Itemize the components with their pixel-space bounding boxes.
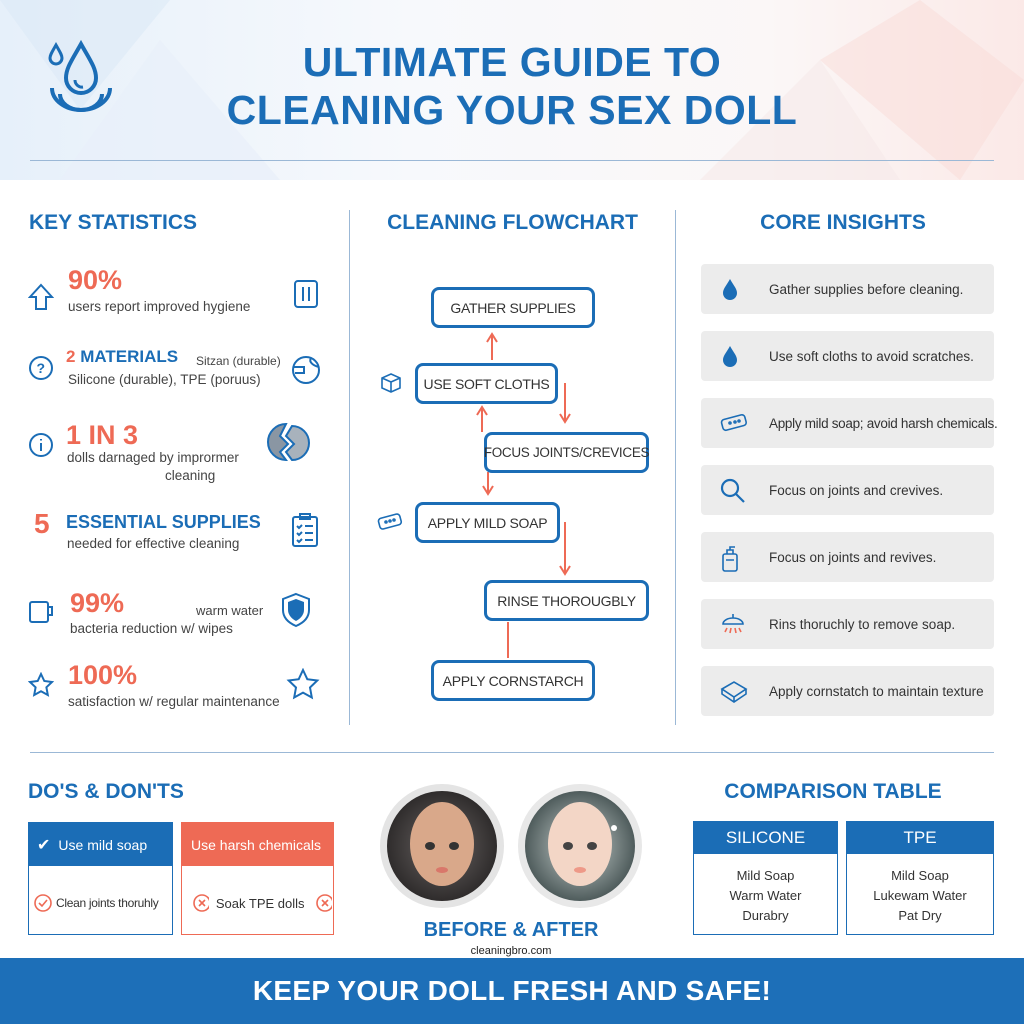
stat: 2 materials: ? [36, 360, 45, 376]
source text: cleaningbro.com [471, 945, 551, 957]
flow step: focus joints: FOCUS JOINTS/CREVICES [484, 445, 649, 460]
insight 4 [701, 465, 994, 515]
insight 2: Use soft cloths to avoid scratches. [769, 348, 974, 364]
heading: key statistics: KEY STATISTICS [29, 211, 197, 234]
stat: 2 materials: Sitzan (durable) [196, 354, 281, 368]
header background [0, 0, 1024, 180]
insight 3 [701, 398, 994, 448]
do box: Use mild soap [58, 836, 147, 852]
stat: 99%: 99% [70, 588, 124, 618]
insight 3: Apply mild soap; avoid harsh chemicals. [769, 416, 997, 430]
column: tpe: TPE [903, 828, 937, 847]
insight 7: Apply cornstatch to maintain texture [769, 684, 984, 698]
footer banner [0, 958, 1024, 1024]
dont box: Soak TPE dolls [216, 896, 305, 910]
title: CLEANING YOUR SEX DOLL [227, 87, 797, 133]
insight 7 [701, 666, 994, 716]
stat: 1 in 3: cleaning [165, 468, 215, 483]
title [227, 39, 797, 133]
heading: comparison table: COMPARISON TABLE [724, 780, 942, 803]
column: tpe [846, 821, 994, 935]
flow step: gather supplies [431, 287, 595, 328]
column: silicone: SILICONE [726, 828, 805, 847]
face: before [380, 784, 504, 908]
stat: 2 materials: 2 MATERIALS [66, 347, 178, 366]
flow step: apply cornstarch [431, 660, 595, 701]
icon: water drop logo [48, 40, 112, 112]
panel: comparison table [693, 780, 994, 935]
face: after [518, 784, 642, 908]
dont box: Use harsh chemicals [191, 836, 321, 852]
column: silicone: Durabry [742, 908, 789, 923]
stat: 99%: warm water [196, 603, 263, 618]
stat: 99% [29, 588, 310, 636]
stat: 5 essential supplies: 5 [34, 508, 50, 539]
column: silicone: Mild Soap [737, 868, 794, 883]
flow step: apply cornstarch: APPLY CORNSTARCH [443, 672, 583, 688]
insight 1 [701, 264, 994, 314]
panel: dos and donts [28, 780, 334, 935]
stat: 5 essential supplies [34, 508, 318, 551]
do box [28, 822, 173, 935]
stat: 100% [28, 660, 320, 709]
footer banner: KEEP YOUR DOLL FRESH AND SAFE! [253, 975, 771, 1006]
column: tpe: Pat Dry [898, 908, 942, 923]
insight 6: Rins thoruchly to remove soap. [769, 616, 955, 632]
icon: cube [381, 373, 401, 393]
stat: 2 materials [29, 347, 320, 387]
column: silicone [693, 821, 838, 935]
flow step: apply mild soap: APPLY MILD SOAP [428, 514, 547, 530]
heading: cleaning flowchart: CLEANING FLOWCHART [387, 211, 638, 234]
flow step: rinse thoroughly: RINSE THOROUGBLY [497, 592, 636, 608]
stat: 2 materials: Silicone (durable), TPE (poruus) [68, 372, 261, 387]
insight 5: Focus on joints and revives. [769, 550, 936, 564]
column: silicone: Warm Water [730, 888, 801, 903]
flow step: gather supplies: GATHER SUPPLIES [450, 300, 576, 316]
insight 2 [701, 331, 994, 381]
insight 6 [701, 599, 994, 649]
title: ULTIMATE GUIDE TO [303, 39, 721, 85]
flowchart arrows [476, 332, 571, 658]
insight 4: Focus on joints and crevives. [769, 482, 943, 498]
stat: 90% [28, 265, 318, 314]
flow step: use soft cloths [415, 363, 558, 404]
flow step: focus joints [484, 432, 649, 473]
before and after images [380, 784, 642, 957]
stat: 1 in 3: 1 IN 3 [66, 420, 138, 450]
stat: 1 in 3 [29, 420, 310, 483]
stat: 5 essential supplies: ESSENTIAL SUPPLIES [66, 512, 261, 532]
panel: key statistics [28, 211, 320, 709]
flow step: rinse thoroughly [484, 580, 649, 621]
insight 5 [701, 532, 994, 582]
do box: ✔ [37, 836, 50, 854]
stat: 90%: users report improved hygiene [68, 299, 250, 314]
insight 1: Gather supplies before cleaning. [769, 282, 963, 296]
stat: 90%: 90% [68, 265, 122, 295]
dont box [181, 822, 334, 935]
stat: 100%: 100% [68, 660, 137, 690]
heading: core insights: CORE INSIGHTS [760, 211, 926, 234]
stat: 100%: satisfaction w/ regular maintenance [68, 694, 280, 709]
flow step: use soft cloths: USE SOFT CLOTHS [424, 376, 549, 392]
do box: Clean joints thoruhly [56, 896, 158, 910]
column: tpe: Lukewam Water [873, 888, 967, 903]
stat: 5 essential supplies: needed for effective cleaning [67, 536, 239, 551]
stat: 99%: bacteria reduction w/ wipes [70, 621, 233, 636]
icon: soap [378, 513, 402, 530]
caption: before and after: BEFORE & AFTER [424, 919, 598, 941]
stat: 1 in 3: dolls darnaged by imprormer [67, 450, 239, 465]
heading: dos and donts: DO'S & DON'TS [28, 780, 184, 803]
column: tpe: Mild Soap [891, 868, 949, 883]
flow step: apply mild soap [415, 502, 560, 543]
